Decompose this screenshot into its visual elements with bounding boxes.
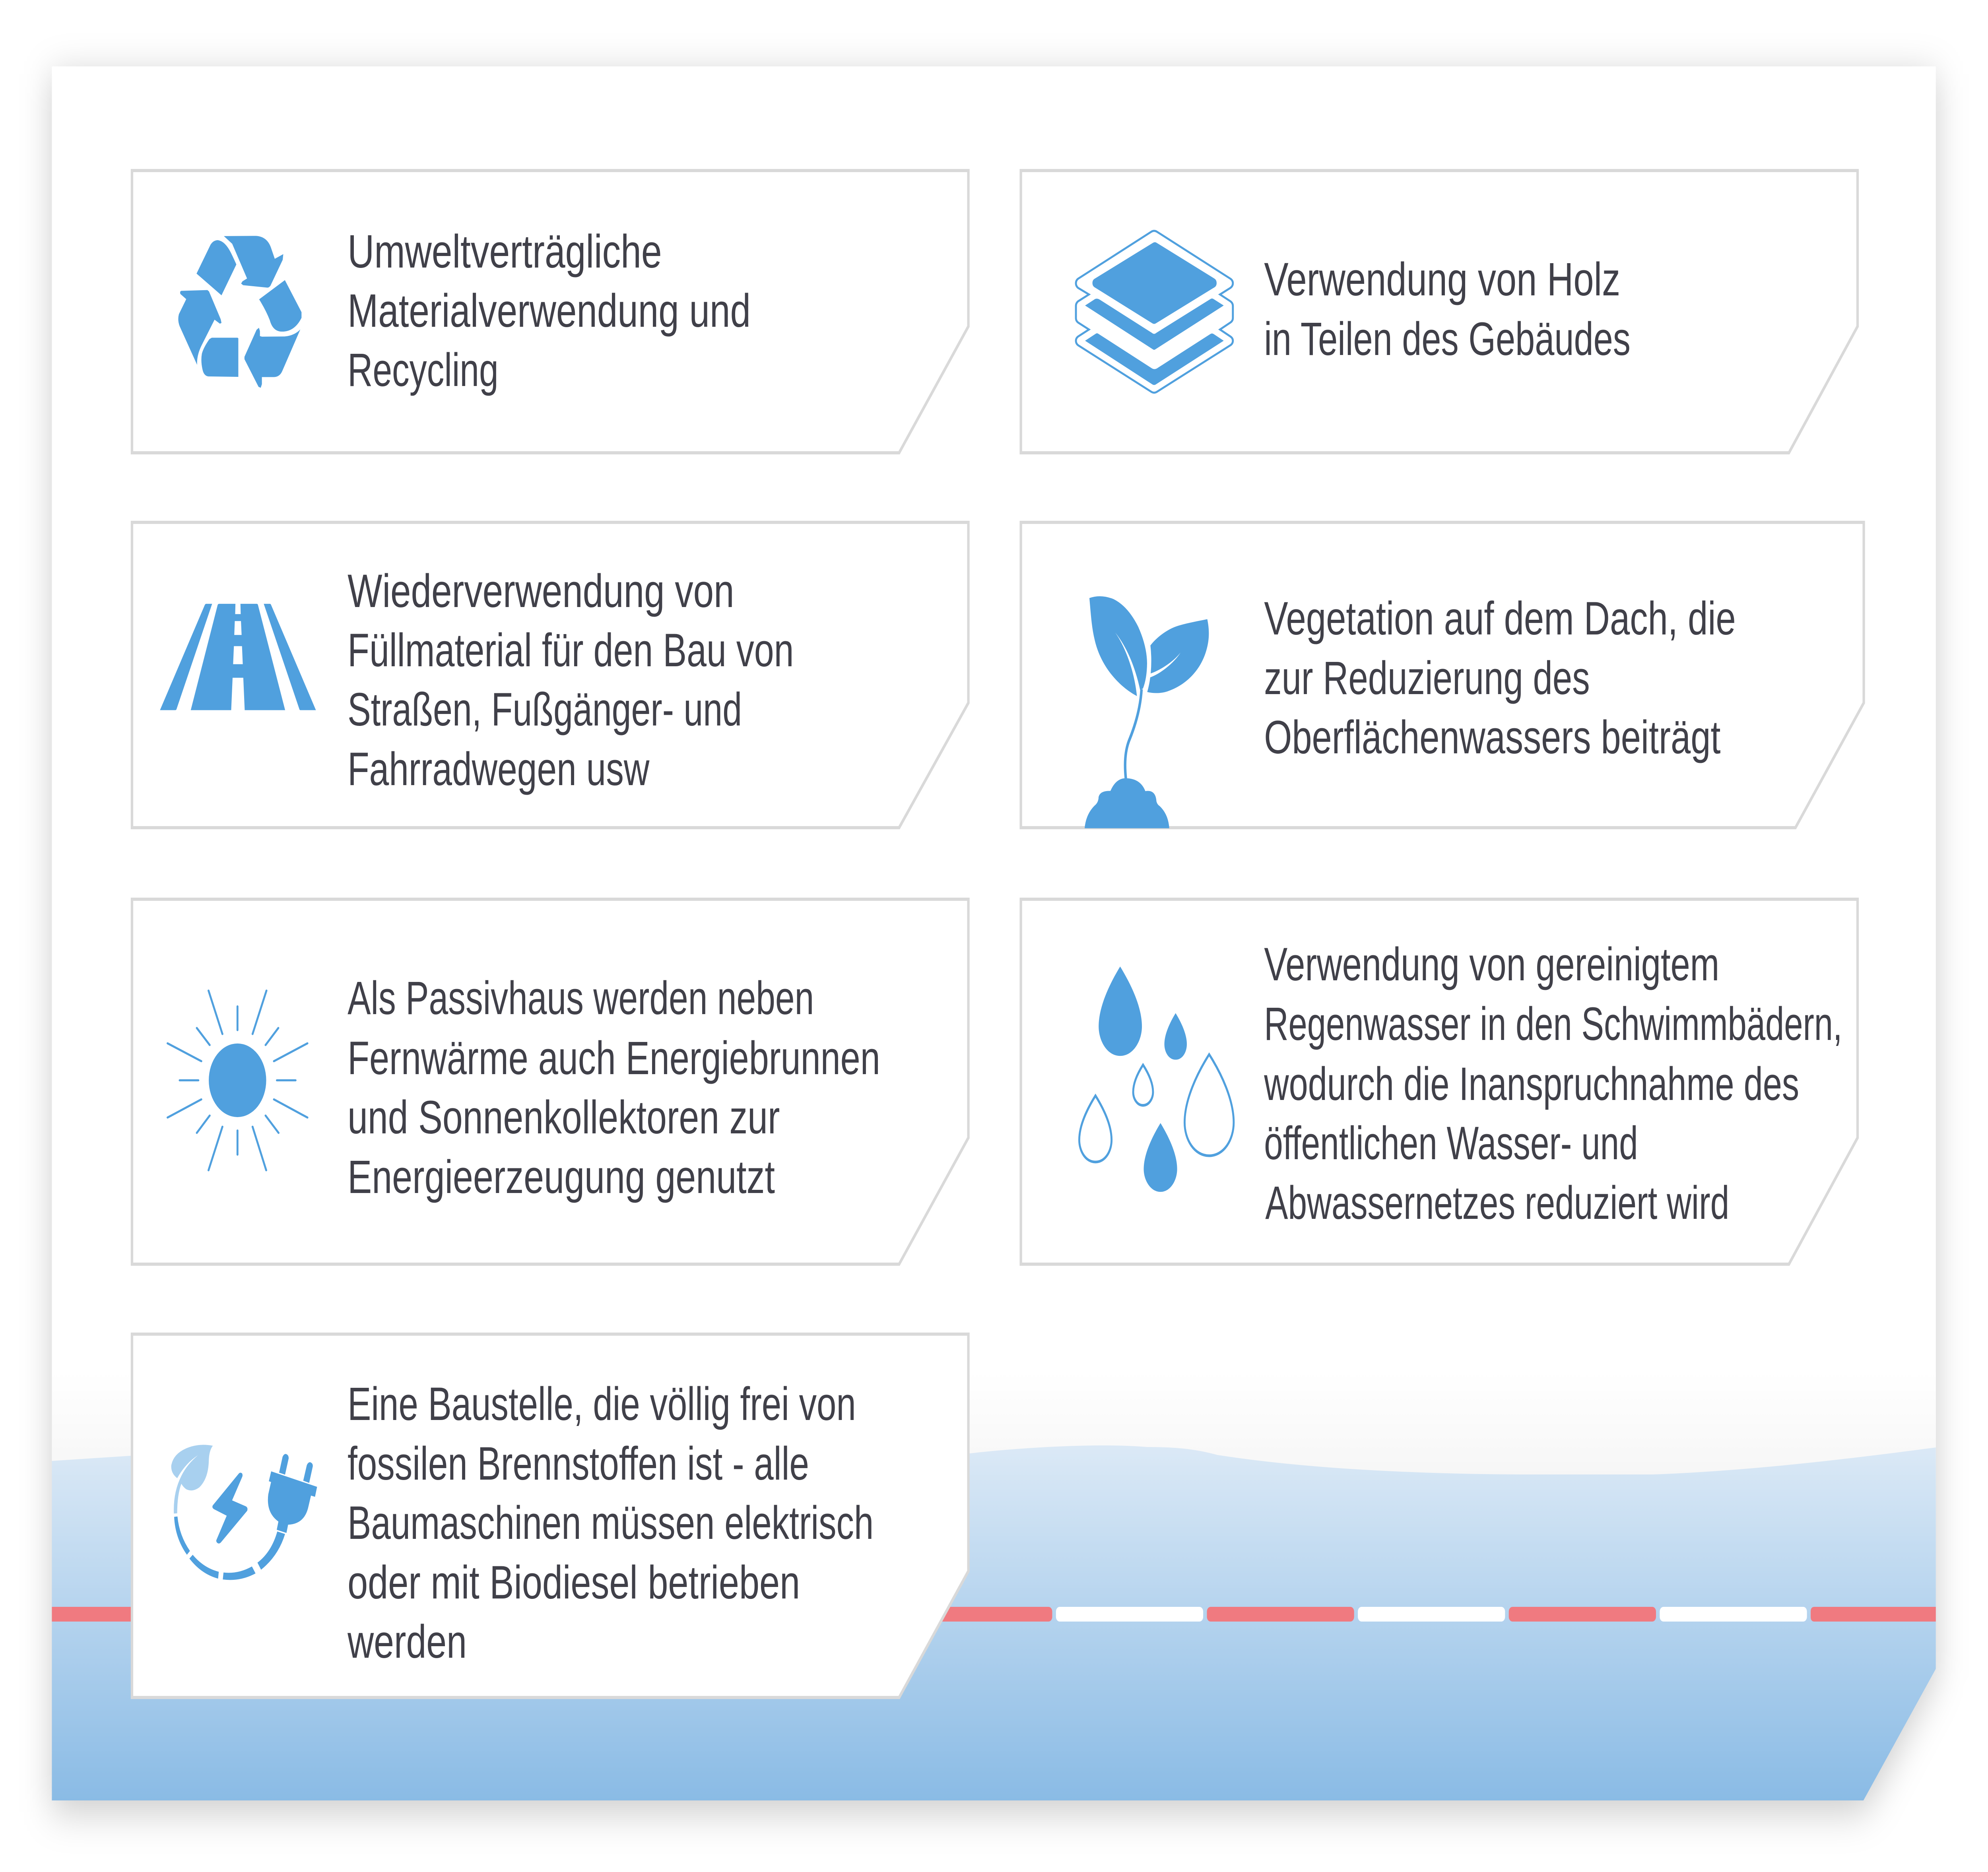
faint shade above the wave bbox=[52, 1372, 1936, 1479]
text: energy: Als Passivhaus werden neben bbox=[348, 972, 814, 1024]
icon: water drops bbox=[1079, 966, 1234, 1192]
text: green roof bbox=[1264, 592, 1736, 764]
panel frame bbox=[132, 171, 969, 453]
icon: green plug bbox=[171, 1445, 317, 1580]
panel: fossil-free site bbox=[132, 1334, 969, 1697]
text: rainwater: Regenwasser in den Schwimmbädern, bbox=[1264, 998, 1842, 1050]
icon: seedling bbox=[1085, 596, 1209, 828]
text: green roof: zur Reduzierung des bbox=[1264, 652, 1590, 704]
panel frame bbox=[1021, 899, 1858, 1264]
text: wood bbox=[1264, 253, 1631, 365]
text: fossil-free site: Eine Baustelle, die völlig frei von bbox=[348, 1378, 856, 1430]
icon: sun bbox=[167, 991, 307, 1170]
text: road fill: Straßen, Fußgänger- und bbox=[348, 683, 742, 736]
panel frame bbox=[1021, 522, 1864, 828]
panel: green roof bbox=[1021, 522, 1864, 828]
icon: recycling arrows bbox=[178, 236, 301, 388]
text: green roof: Oberflächenwassers beiträgt bbox=[1264, 711, 1720, 764]
text: fossil-free site: fossilen Brennstoffen ist - alle bbox=[348, 1437, 809, 1490]
text: road fill bbox=[348, 565, 794, 795]
text: energy: und Sonnenkollektoren zur bbox=[348, 1091, 780, 1144]
text: wood: in Teilen des Gebäudes bbox=[1264, 313, 1631, 365]
text: wood: Verwendung von Holz bbox=[1264, 253, 1620, 306]
text: rainwater: Verwendung von gereinigtem bbox=[1264, 938, 1719, 991]
panel: wood bbox=[1021, 171, 1858, 453]
text: energy: Energieerzeugung genutzt bbox=[348, 1151, 775, 1203]
dashed lane line bbox=[52, 1607, 1936, 1622]
text: rainwater: öffentlichen Wasser- und bbox=[1264, 1117, 1638, 1170]
panel: road fill bbox=[132, 522, 969, 828]
text: fossil-free site bbox=[347, 1378, 874, 1668]
text: energy bbox=[348, 972, 880, 1203]
text: recycling: Recycling bbox=[348, 344, 499, 396]
text: energy: Fernwärme auch Energiebrunnen bbox=[348, 1032, 880, 1084]
text: recycling: Materialverwendung und bbox=[348, 285, 751, 337]
text: fossil-free site: oder mit Biodiesel betrieben bbox=[348, 1556, 800, 1609]
text: fossil-free site: Baumaschinen müssen elektrisch bbox=[348, 1497, 874, 1549]
panel: rainwater bbox=[1021, 899, 1858, 1264]
text: road fill: Wiederverwendung von bbox=[348, 565, 734, 617]
text: green roof: Vegetation auf dem Dach, die bbox=[1264, 592, 1736, 645]
panel frame bbox=[132, 1334, 969, 1697]
text: rainwater: wodurch die Inanspruchnahme des bbox=[1264, 1058, 1799, 1110]
panel: energy bbox=[132, 899, 969, 1264]
panel frame bbox=[132, 899, 969, 1264]
water wave bbox=[52, 1445, 1936, 1800]
text: recycling: Umweltverträgliche bbox=[348, 225, 662, 278]
panel frame bbox=[132, 522, 969, 828]
panel: recycling bbox=[132, 171, 969, 453]
icon: stacked layers bbox=[1076, 231, 1233, 393]
text: road fill: Fahrradwegen usw bbox=[348, 743, 650, 795]
text: recycling bbox=[348, 225, 751, 396]
text: fossil-free site: werden bbox=[347, 1616, 467, 1668]
icon: road bbox=[160, 604, 316, 710]
text: road fill: Füllmaterial für den Bau von bbox=[348, 624, 794, 677]
text: rainwater bbox=[1264, 938, 1842, 1229]
panel frame bbox=[1021, 171, 1858, 453]
text: rainwater: Abwassernetzes reduziert wird bbox=[1265, 1177, 1729, 1229]
